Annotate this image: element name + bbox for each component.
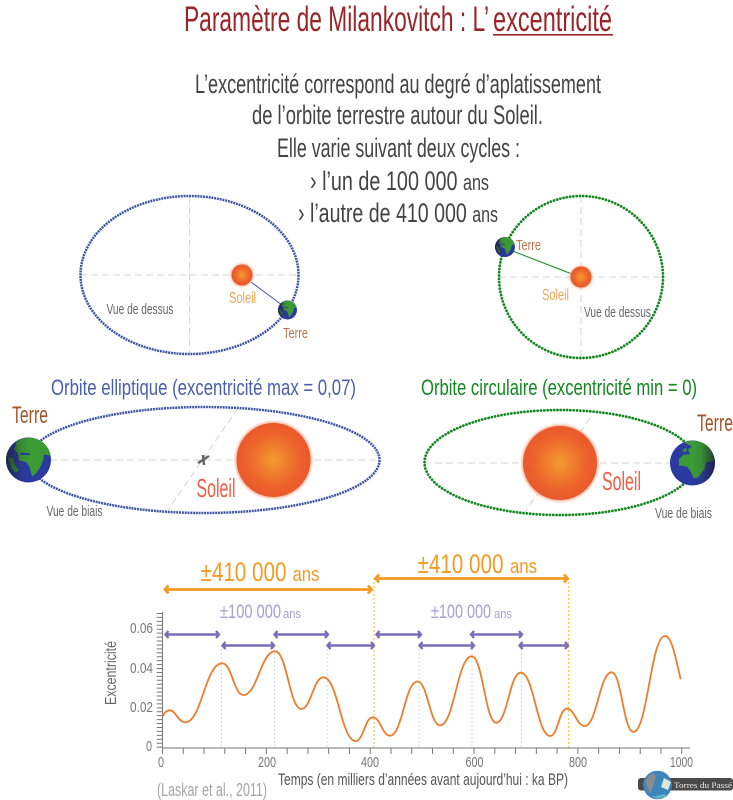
eccentricity curve [163,636,681,741]
y axis: 0 [146,738,152,755]
label: Soleil: Soleil [196,473,236,503]
y axis title: Excentricité [103,641,120,705]
panel: oblique view circular orbit [424,410,733,522]
x axis: 0 [158,754,164,771]
logo: Torres du Passé: Torres du Passé [674,780,732,790]
label: Vue de dessus: Vue de dessus [106,301,174,318]
circular orbit path [499,196,663,358]
x axis: 1000 [670,754,693,771]
panel: top view elliptical orbit [80,196,308,354]
label: Soleil: Soleil [542,287,569,304]
centre mark [198,455,209,465]
label: Terre: Terre [12,402,48,429]
intro text block: Elle varie suivant deux cycles : [277,133,520,163]
elliptical orbit path [28,407,380,513]
icon: earth [670,440,715,486]
label: second 410 000 years: ±410 000 [418,549,504,579]
elliptical orbit path [80,196,298,354]
logo: Torres du Passé [638,771,733,799]
label: Soleil: Soleil [602,466,641,496]
heading: elliptical orbit: Orbite elliptique (excentricité max = 0,07) [51,375,356,400]
label: second 100 000 years: ±100 000 [431,602,491,623]
radius line [510,250,572,274]
y axis: 0.06 [130,620,153,637]
x axis: 600 [466,754,484,771]
y axis: 0.04 [130,660,153,677]
label: Terre: Terre [283,325,308,342]
icon: sun [235,422,312,498]
orange arrows: 410 000 year cycles [165,574,568,594]
icon: sun [522,424,598,502]
intro text block: › l’autre de 410 000 ans [298,198,498,228]
intro text block: › l’un de 100 000 ans [310,166,489,196]
label: second 100 000 years: ans [494,606,512,621]
icon: earth [278,300,297,320]
purple arrows: 100 000 year cycles [166,631,568,649]
label: first 100 000 years: ±100 000 [220,602,281,623]
label: Vue de biais: Vue de biais [46,503,102,520]
label: second 410 000 years: ans [510,556,537,578]
label: first 410 000 years: ±410 000 [200,557,286,587]
x axis: 200 [258,754,276,771]
x axis: 800 [569,754,587,771]
panel: top view circular orbit [495,196,663,358]
icon: earth [6,438,51,482]
icon: sun [570,266,592,288]
y axis [130,612,162,755]
panel: oblique view elliptical orbit [6,402,380,520]
intro text block [195,69,601,228]
chart: eccentricity over time [103,578,693,800]
near-circular orbit path [424,410,696,515]
radius line [251,282,282,305]
x axis title: Temps (en milliers d’années avant aujourd’hui : ka BP) [278,770,568,789]
label: first 410 000 years: ans [292,564,320,586]
intro text block: de l’orbite terrestre autour du Soleil. [252,100,543,130]
title: excentricité [493,0,612,39]
source citation: (Laskar et al., 2011) [157,780,267,800]
title: Paramètre de Milankovitch : L’ [184,0,489,39]
icon: sun [230,264,254,286]
label: first 100 000 years: ans [283,606,301,621]
label: Terre: Terre [516,237,541,254]
x axis [158,748,693,771]
x axis: 400 [361,754,379,771]
icon: earth [495,237,515,257]
y axis: 0.02 [130,699,153,716]
label: Soleil: Soleil [229,290,256,307]
label: Vue de dessus: Vue de dessus [584,304,651,321]
